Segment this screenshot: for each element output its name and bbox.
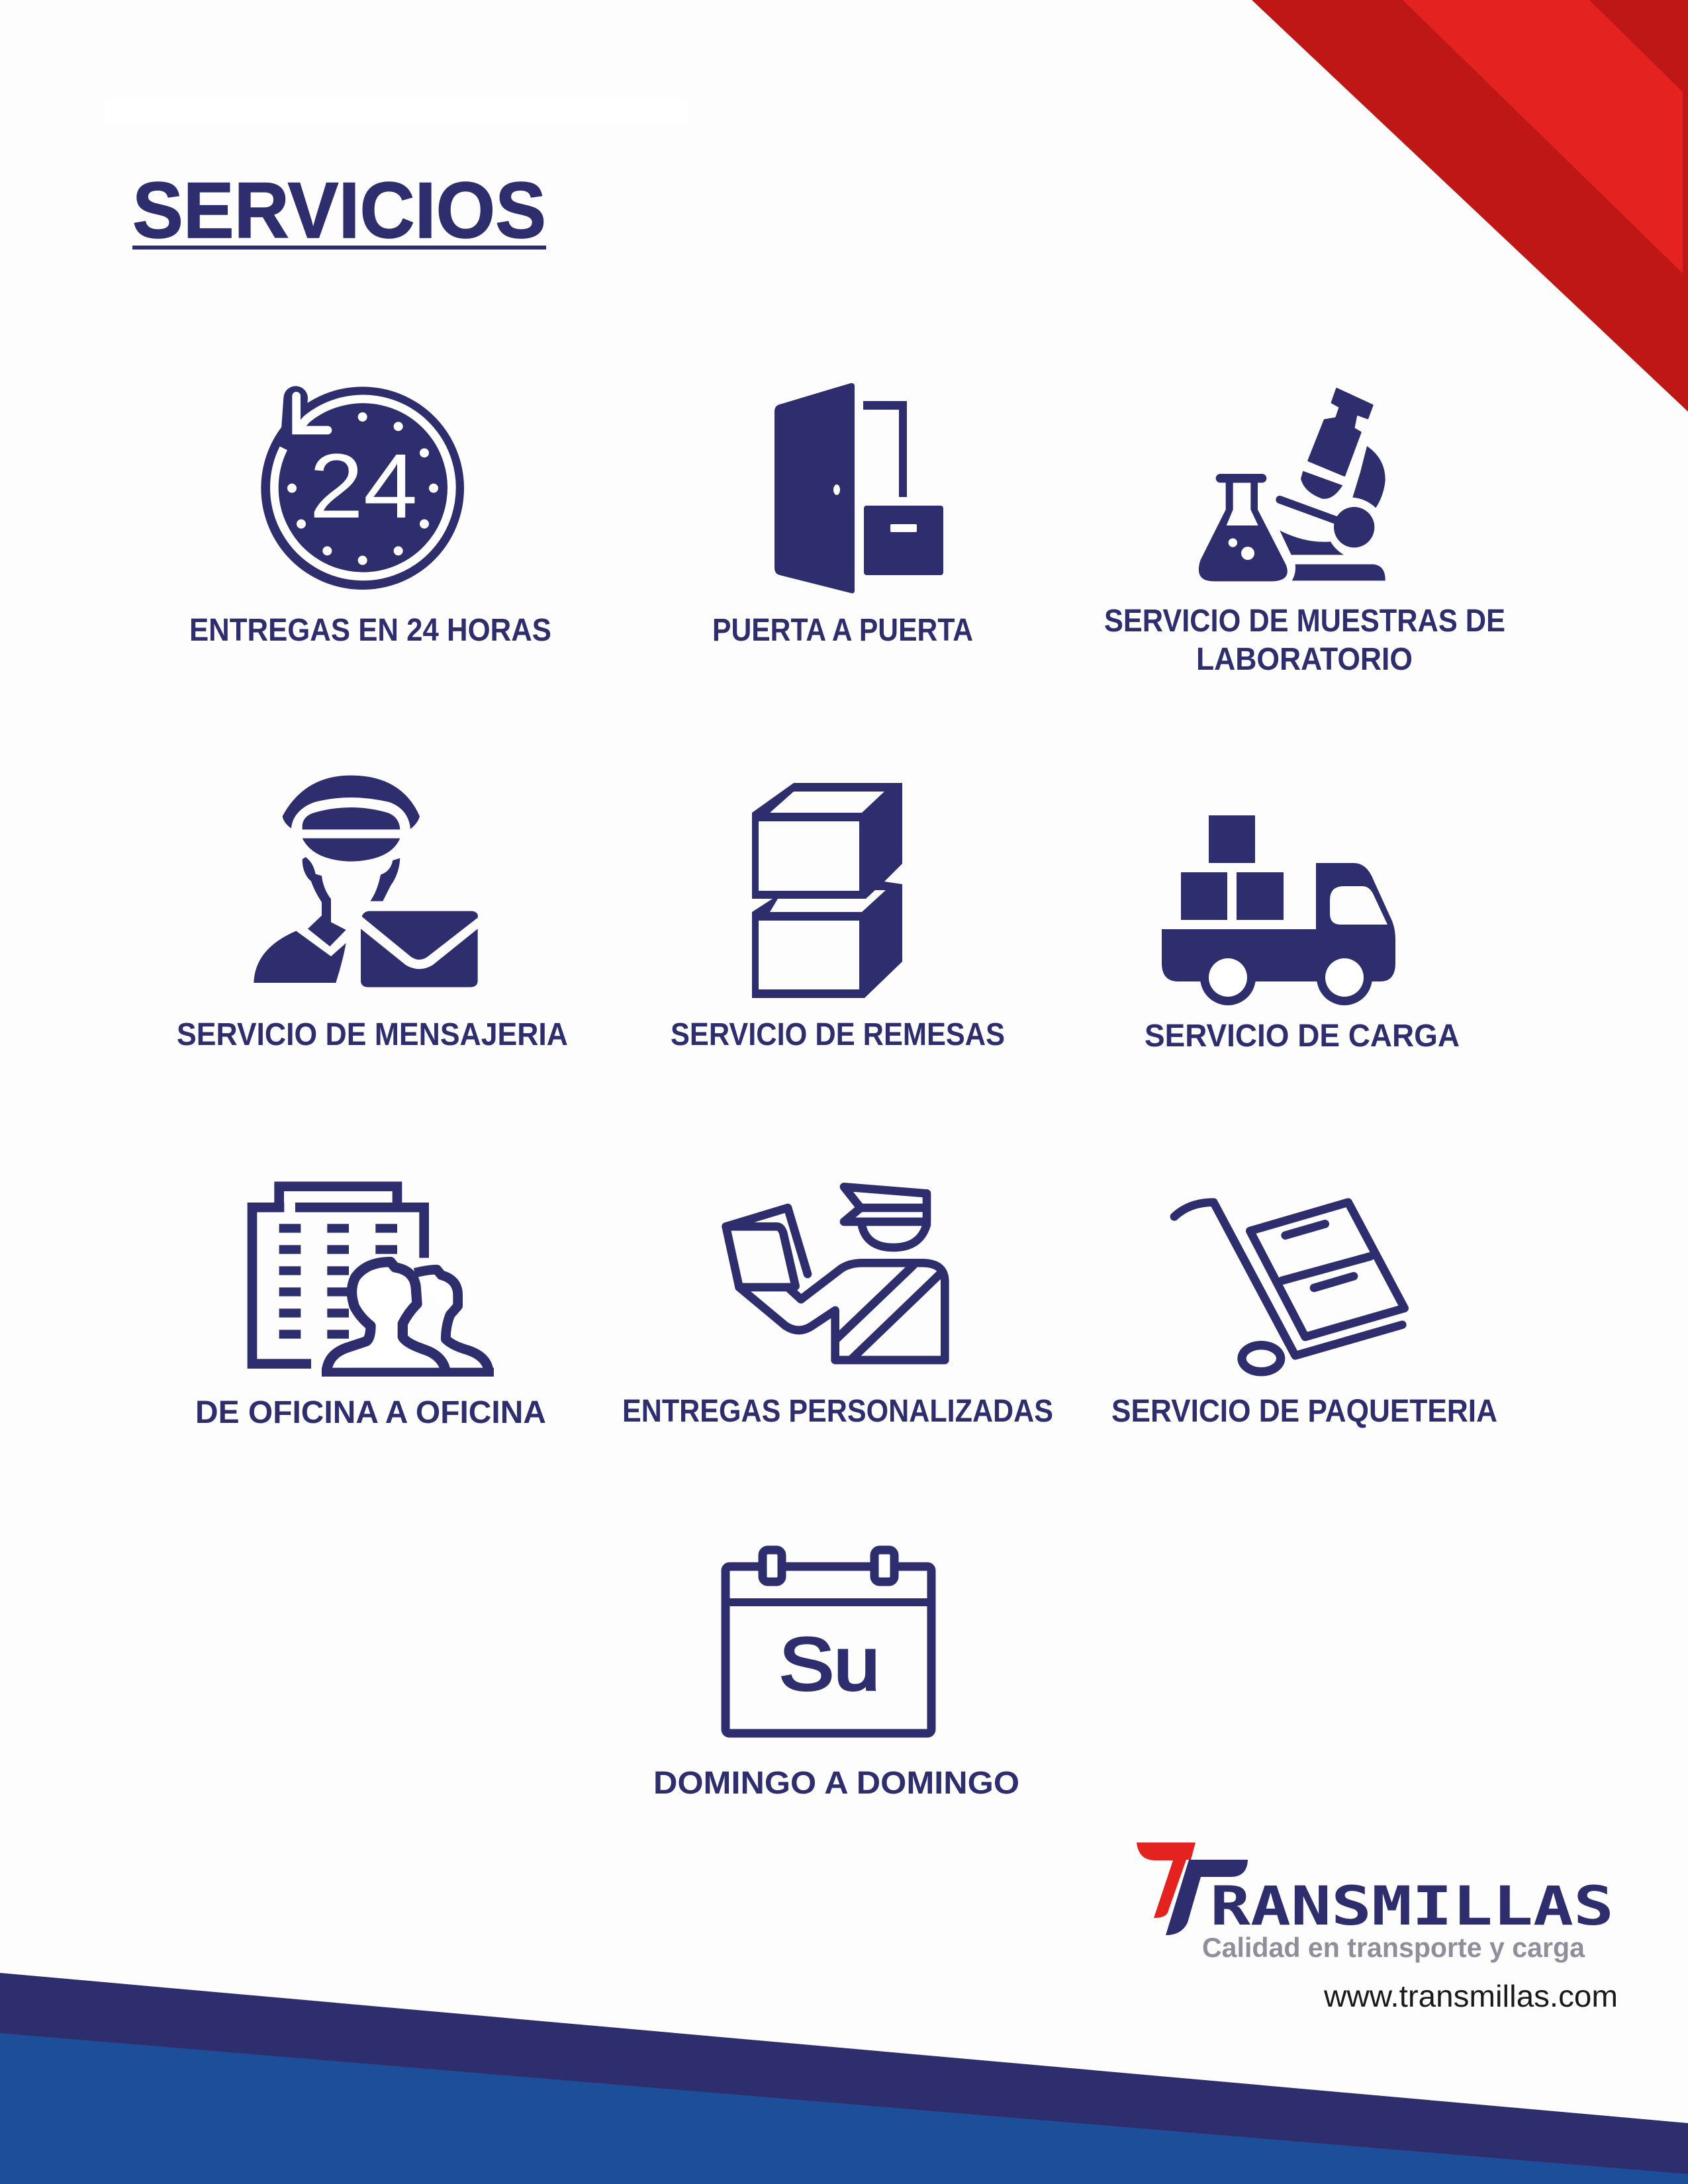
icon: 24 hour clock: 24 bbox=[309, 435, 418, 537]
decorative red corner bbox=[1252, 0, 1688, 412]
icon: calendar sunday bbox=[726, 1550, 931, 1733]
website url: www.transmillas.com bbox=[1323, 1979, 1618, 2013]
label bbox=[1104, 604, 1505, 677]
label: SERVICIO DE MENSAJERIA bbox=[177, 1017, 568, 1052]
panel: puerta a puerta bbox=[712, 383, 973, 648]
label: SERVICIO DE PAQUETERIA bbox=[1111, 1394, 1497, 1429]
logo tagline: Calidad en transporte y carga bbox=[1202, 1932, 1585, 1963]
icon: flask and microscope bbox=[1199, 388, 1385, 581]
panel: servicio de remesas bbox=[671, 783, 1005, 1052]
title: SERVICIOS bbox=[132, 166, 546, 255]
icon: 24 hour clock bbox=[261, 387, 464, 590]
label: SERVICIO DE MUESTRAS DE bbox=[1104, 604, 1505, 639]
icon: hand truck with boxes bbox=[1174, 1203, 1405, 1372]
panel: servicio de paqueteria bbox=[1111, 1203, 1497, 1429]
icon: office building and people bbox=[252, 1187, 494, 1377]
label: DE OFICINA A OFICINA bbox=[195, 1395, 546, 1430]
panel: domingo a domingo bbox=[653, 1550, 1019, 1801]
icon: truck with boxes bbox=[1162, 815, 1395, 1005]
panel: de oficina a oficina bbox=[195, 1187, 546, 1430]
icon: stacked boxes bbox=[752, 783, 902, 998]
panel: servicio de mensajeria bbox=[177, 776, 568, 1052]
icon: door and box bbox=[774, 383, 943, 593]
icon: courier reading a package bbox=[726, 1187, 945, 1360]
panel: entregas personalizadas bbox=[622, 1187, 1053, 1429]
label: SERVICIO DE CARGA bbox=[1145, 1019, 1460, 1054]
label: SERVICIO DE REMESAS bbox=[671, 1017, 1005, 1052]
label: DOMINGO A DOMINGO bbox=[653, 1766, 1019, 1801]
label: PUERTA A PUERTA bbox=[712, 613, 973, 648]
panel: entregas en 24 horas bbox=[189, 387, 551, 648]
label: ENTREGAS EN 24 HORAS bbox=[189, 613, 551, 648]
icon: calendar sunday: Su bbox=[779, 1623, 880, 1706]
label: LABORATORIO bbox=[1196, 642, 1413, 677]
logo wordmark: RANSMILLAS bbox=[1210, 1876, 1614, 1938]
icon: messenger with envelope bbox=[254, 776, 478, 987]
logo: transmillas bbox=[1137, 1843, 1614, 1963]
panel: servicio de muestras de laboratorio bbox=[1104, 388, 1505, 677]
label: ENTREGAS PERSONALIZADAS bbox=[622, 1394, 1053, 1429]
panel: servicio de carga bbox=[1145, 815, 1460, 1054]
decorative bottom bands bbox=[0, 1973, 1688, 2184]
logo mark: double T bbox=[1137, 1843, 1248, 1935]
